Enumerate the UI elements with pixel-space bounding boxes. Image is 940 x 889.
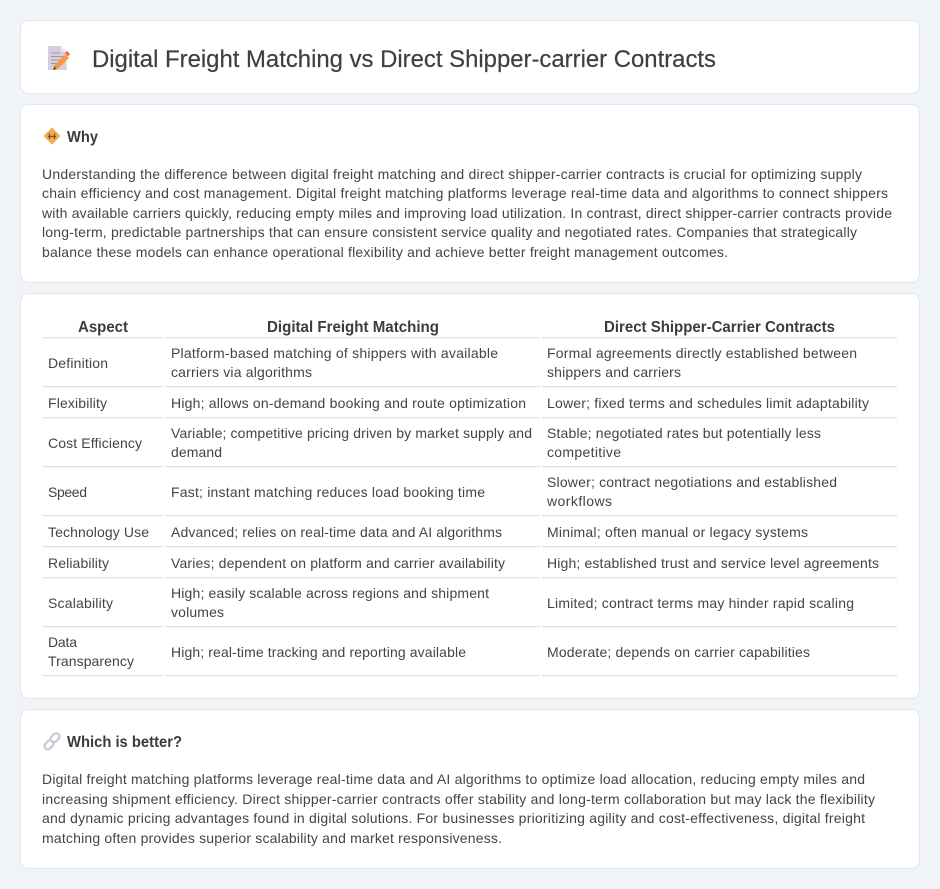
text block: why: long-term, predictable partnerships that can ensure consistent service quality and negotiated rates. Companies that strategically [42,224,857,240]
text block: why [41,166,892,260]
icon: link [43,732,61,751]
heading: which is better: Which is better? [67,734,182,751]
row: scalability: Scalability [48,595,113,611]
text block: why: balance these models can enhance operational flexibility and achieve better freight management outcomes. [42,244,728,260]
row: data transparency [43,634,897,676]
row: definition [43,345,897,387]
text block: which is better: matching often provides superior scalability and market responsiveness. [42,830,502,846]
row: data transparency: Data [48,634,77,650]
text block: why: chain efficiency and cost management. Digital freight matching platforms leverage real-time data and algorithms to connect shippers [42,185,888,201]
row: technology use: Advanced; relies on real-time data and AI algorithms [171,524,502,540]
row: scalability: volumes [171,604,224,620]
row: definition: Platform-based matching of shippers with available [171,345,498,361]
row: cost efficiency: Variable; competitive pricing driven by market supply and [171,425,532,441]
row: flexibility: Lower; fixed terms and schedules limit adaptability [547,395,869,411]
row: flexibility: Flexibility [48,395,107,411]
panel: comparison table [20,294,920,698]
row: speed: Slower; contract negotiations and established [547,474,837,490]
row: definition: shippers and carriers [547,364,681,380]
icon: document with pencil [48,46,70,70]
text block: which is better: increasing shipment efficiency. Direct shipper-carrier contracts offer stability and long-term collaboration but may lack the flexibility [42,791,875,807]
row: speed: Fast; instant matching reduces load booking time [171,484,485,500]
row: speed [43,474,897,516]
row: definition: carriers via algorithms [171,364,312,380]
text block: why: with available carriers quickly, reducing empty miles and improving load utilization. In contrast, direct shipper-carrier contracts provide [41,205,892,221]
row: data transparency: Transparency [48,653,134,669]
row: cost efficiency: competitive [547,444,621,460]
row: technology use: Minimal; often manual or legacy systems [547,524,808,540]
table header [43,319,897,338]
table header: Digital Freight Matching [267,319,439,336]
panel: header [20,20,920,94]
row: cost efficiency: Stable; negotiated rates but potentially less [547,425,821,441]
table header: Direct Shipper-Carrier Contracts [604,319,835,336]
row: definition: Definition [48,355,108,371]
heading: why: Why [67,129,98,146]
row: cost efficiency: demand [171,444,222,460]
table header: Aspect [78,319,129,336]
row: data transparency: High; real-time tracking and reporting available [171,644,466,660]
text block: why: Understanding the difference between digital freight matching and direct shipper-carrier contracts is crucial for optimizing supply [42,166,862,182]
panel: which is better [20,710,920,868]
row: flexibility [43,395,897,418]
text block: which is better: and dynamic pricing advantages found in digital solutions. For businesses prioritizing agility and cost-effectiveness, digital freight [42,810,865,826]
icon: warning diamond [44,128,60,144]
panel: why [20,104,920,282]
row: speed: Speed [48,484,87,500]
row: definition: Formal agreements directly established between [547,345,857,361]
row: data transparency: Moderate; depends on carrier capabilities [547,644,810,660]
title: Digital Freight Matching vs Direct Shipper-carrier Contracts [92,46,716,73]
text block: which is better [42,771,875,846]
row: speed: workflows [546,493,612,509]
row: flexibility: High; allows on-demand booking and route optimization [171,395,526,411]
row: scalability [43,585,897,627]
text block: which is better: Digital freight matching platforms leverage real-time data and AI algorithms to optimize load allocation, reducing empty miles and [42,771,865,787]
row: reliability: High; established trust and service level agreements [547,555,879,571]
row: scalability: Limited; contract terms may hinder rapid scaling [547,595,854,611]
row: reliability [43,555,897,578]
row: scalability: High; easily scalable across regions and shipment [171,585,489,601]
row: technology use [43,524,897,547]
row: reliability: Varies; dependent on platform and carrier availability [171,555,505,571]
row: reliability: Reliability [48,555,109,571]
row: technology use: Technology Use [48,524,149,540]
row: cost efficiency: Cost Efficiency [48,435,142,451]
row: cost efficiency [43,425,897,467]
